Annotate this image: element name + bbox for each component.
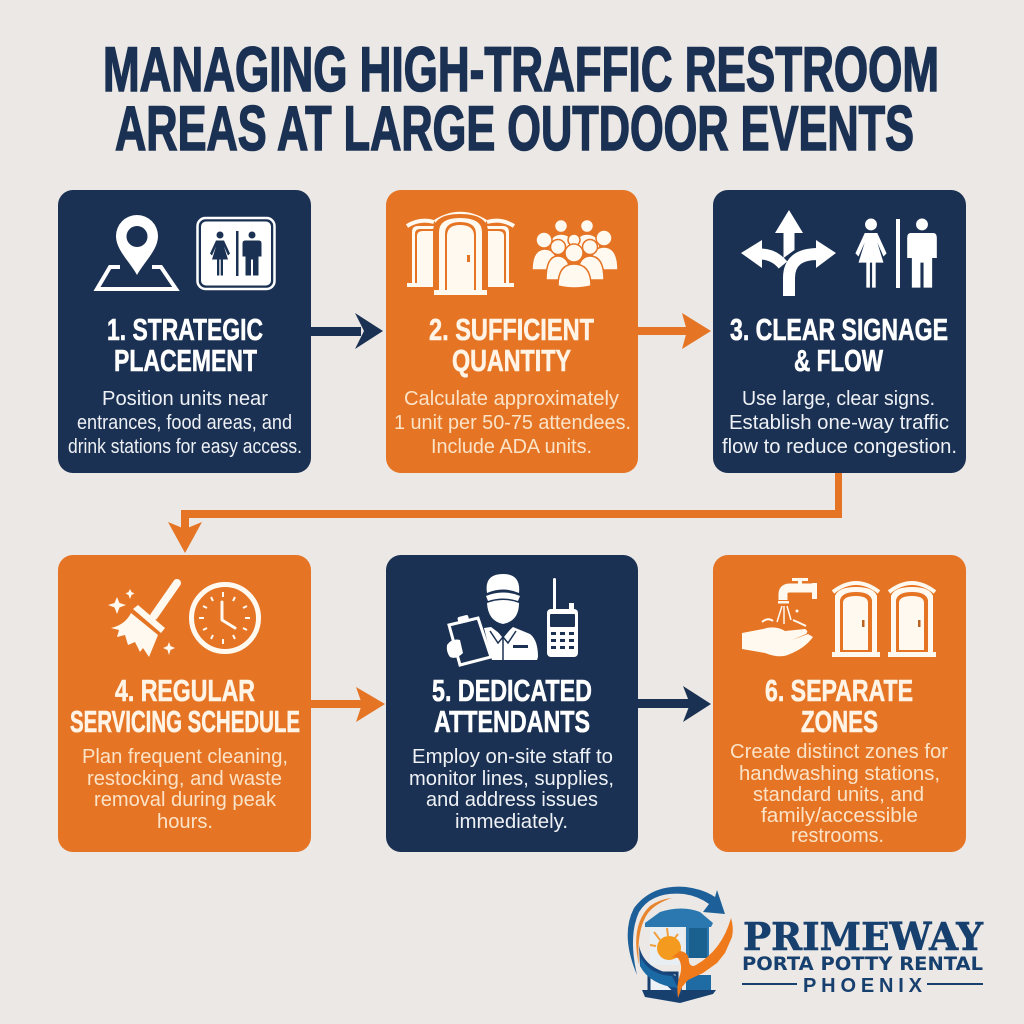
description: Employ on-site staff to <box>412 745 613 768</box>
icon: row of portable toilets <box>407 214 514 295</box>
icon: attendant with clipboard <box>447 574 538 665</box>
description <box>82 745 288 833</box>
description: restrooms. <box>791 824 884 847</box>
description: 1 unit per 50-75 attendees. <box>394 411 631 434</box>
heading <box>765 673 913 739</box>
heading: 3. CLEAR SIGNAGE <box>730 312 948 347</box>
wordmark: PHOENIX <box>803 975 923 997</box>
icon: clock <box>192 584 258 652</box>
logo: Primeway Porta Potty Rental Phoenix <box>628 887 984 1003</box>
description: Establish one-way traffic <box>729 411 949 434</box>
wordmark: PORTA POTTY RENTAL <box>742 953 983 975</box>
heading <box>70 673 300 739</box>
heading <box>429 312 594 378</box>
heading: ATTENDANTS <box>434 704 590 739</box>
panel: step 5 dedicated attendants <box>386 555 638 852</box>
panel: step 2 sufficient quantity <box>386 190 638 473</box>
icon: broom with sparkles <box>108 583 177 657</box>
description: hours. <box>157 810 213 833</box>
description: removal during peak <box>94 788 277 811</box>
wordmark: PRIMEWAY <box>743 914 984 959</box>
icon: crowd of people <box>532 220 618 288</box>
heading: ZONES <box>801 704 878 739</box>
panel: step 3 clear signage and flow <box>713 190 966 473</box>
description <box>68 387 302 458</box>
title <box>103 35 939 164</box>
arrow: step 2 to step 3 <box>632 313 711 349</box>
description: flow to reduce congestion. <box>722 435 957 458</box>
description: Position units near <box>102 387 268 410</box>
description: monitor lines, supplies, <box>409 767 614 790</box>
icon: two-way radio <box>547 578 578 657</box>
panel: step 6 separate zones <box>713 555 966 852</box>
description: Calculate approximately <box>404 387 620 410</box>
icon: two portable toilets <box>832 583 936 657</box>
heading: 5. DEDICATED <box>432 673 592 708</box>
heading: PLACEMENT <box>114 343 257 378</box>
description: Plan frequent cleaning, <box>82 745 288 768</box>
description: family/accessible <box>761 804 918 827</box>
logo mark: phoenix and portable toilet <box>628 887 733 1003</box>
description <box>394 387 631 458</box>
description <box>730 740 948 847</box>
description: entrances, food areas, and <box>77 411 292 434</box>
icon: woman and man restroom figures <box>855 219 937 288</box>
wordmark <box>742 914 984 997</box>
panel: step 1 strategic placement <box>58 190 311 473</box>
heading: 4. REGULAR <box>115 673 255 708</box>
description: restocking, and waste <box>87 767 282 790</box>
heading <box>432 673 592 739</box>
icon: handwashing faucet <box>742 578 817 656</box>
description <box>722 387 957 458</box>
description: Create distinct zones for <box>730 740 948 763</box>
heading: 2. SUFFICIENT <box>429 312 594 347</box>
heading: 6. SEPARATE <box>765 673 913 708</box>
description: Include ADA units. <box>431 435 592 458</box>
description: Use large, clear signs. <box>742 387 935 410</box>
arrow: step 3 down and back to step 4 <box>168 470 842 553</box>
heading: QUANTITY <box>452 343 571 378</box>
panel: step 4 regular servicing schedule <box>58 555 311 852</box>
description <box>409 745 614 833</box>
heading <box>107 312 263 378</box>
arrow: step 5 to step 6 <box>632 686 711 722</box>
heading <box>730 312 948 378</box>
description: standard units, and <box>753 783 924 806</box>
icon: map pin on map <box>97 215 176 289</box>
description: drink stations for easy access. <box>68 435 302 458</box>
heading: SERVICING SCHEDULE <box>70 704 300 739</box>
arrow: step 4 to step 5 <box>305 687 385 722</box>
arrow: step 1 to step 2 <box>305 313 383 349</box>
icon: restroom sign <box>198 218 274 289</box>
icon: direction arrows <box>741 210 836 296</box>
description: immediately. <box>455 810 568 833</box>
heading: & FLOW <box>794 343 884 378</box>
description: handwashing stations, <box>739 762 940 785</box>
heading: 1. STRATEGIC <box>107 312 263 347</box>
description: and address issues <box>426 788 598 811</box>
